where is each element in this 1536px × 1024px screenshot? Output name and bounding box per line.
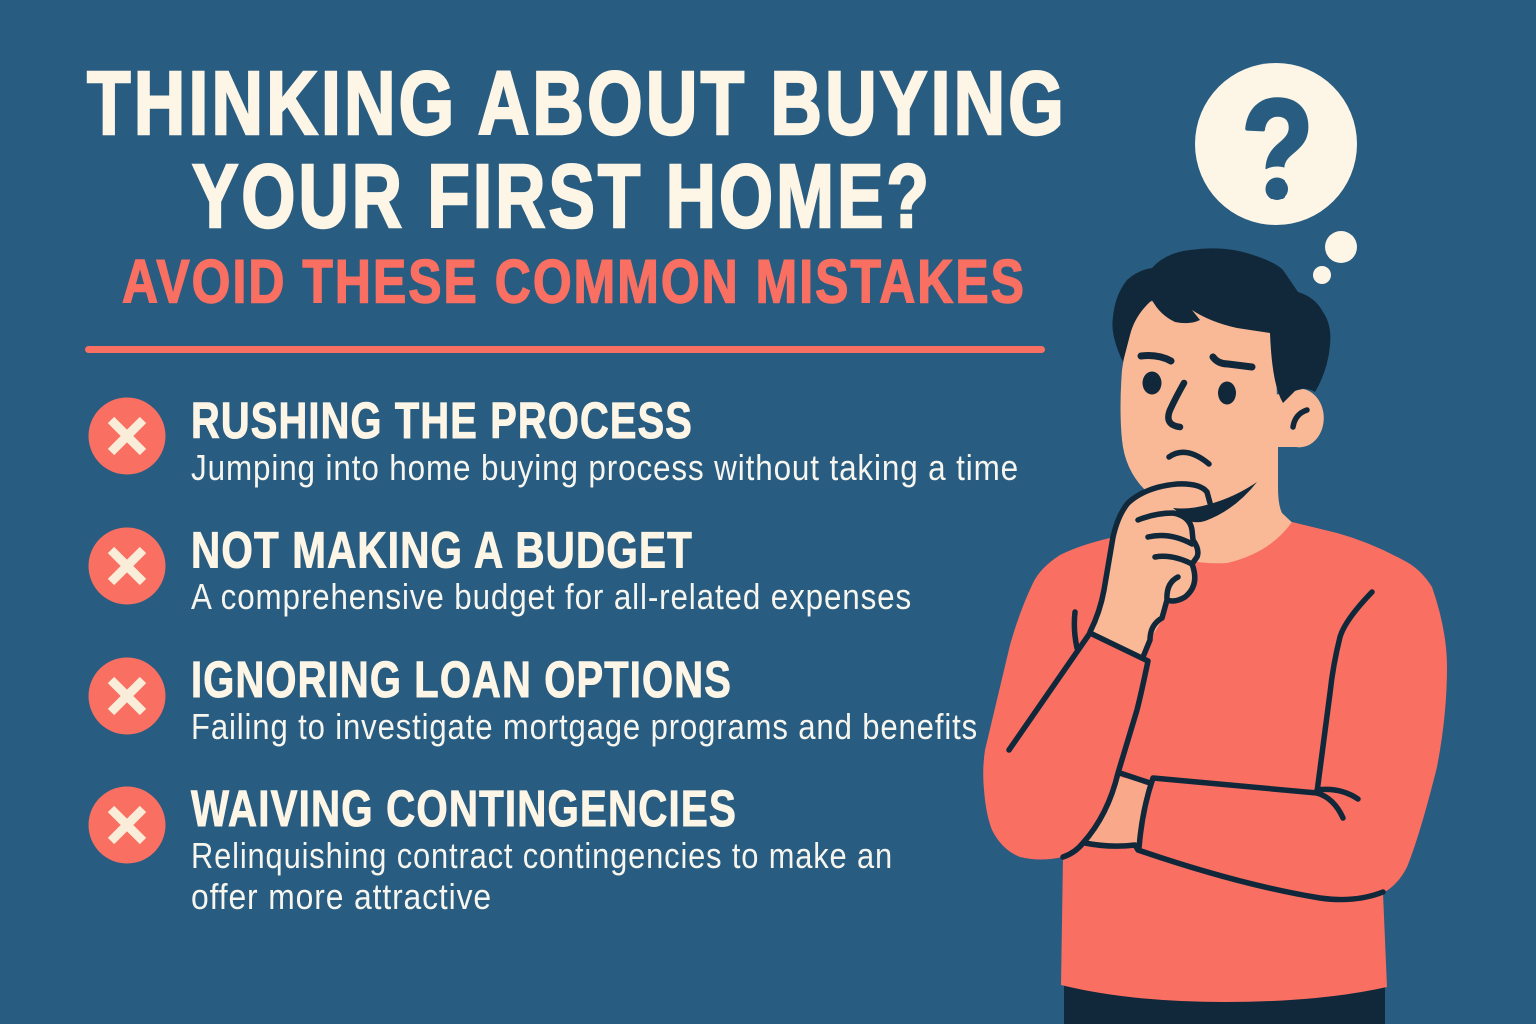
lower hand <box>1087 777 1150 847</box>
person illustration <box>983 248 1447 1024</box>
hand and fingers <box>1090 482 1257 658</box>
mistake 4: waiving contingencies <box>88 780 893 917</box>
pants <box>1064 980 1385 1024</box>
mouth <box>1169 452 1209 464</box>
title: YOUR FIRST HOME? <box>192 147 932 247</box>
mistake 3: ignoring loan options <box>88 651 978 747</box>
title <box>87 54 1067 247</box>
ear line <box>1293 410 1307 427</box>
neck <box>1150 440 1300 590</box>
eyes <box>1142 372 1236 404</box>
subtitle: AVOID THESE COMMON MISTAKES <box>122 248 1026 316</box>
icon: x mark <box>88 528 166 604</box>
description: A comprehensive budget for all-related expenses <box>191 576 912 617</box>
divider rule <box>85 346 1045 353</box>
sleeve outlines <box>1009 592 1383 900</box>
icon: x mark <box>88 398 166 474</box>
sweater <box>983 522 1447 1002</box>
description: Failing to investigate mortgage programs and benefits <box>191 706 978 747</box>
thought bubble <box>1195 63 1357 284</box>
heading: NOT MAKING A BUDGET <box>191 522 693 578</box>
title: THINKING ABOUT BUYING <box>87 54 1067 154</box>
icon: question mark: ? <box>1242 70 1314 227</box>
description: offer more attractive <box>191 876 492 917</box>
mistake 2: not making a budget <box>88 522 912 617</box>
description: Jumping into home buying process without taking a time <box>191 447 1019 488</box>
heading: IGNORING LOAN OPTIONS <box>191 651 732 708</box>
description: Relinquishing contract contingencies to make an <box>191 835 893 876</box>
mistake 1: rushing the process <box>88 392 1019 488</box>
heading: WAIVING CONTINGENCIES <box>191 780 737 837</box>
description <box>191 835 893 917</box>
ear <box>1270 389 1324 447</box>
hair <box>1112 248 1330 403</box>
eyebrows <box>1141 356 1252 367</box>
nose <box>1168 383 1184 427</box>
heading: RUSHING THE PROCESS <box>191 392 693 449</box>
face <box>1120 300 1278 510</box>
icon: x mark <box>88 786 166 864</box>
icon: x mark <box>88 658 166 734</box>
